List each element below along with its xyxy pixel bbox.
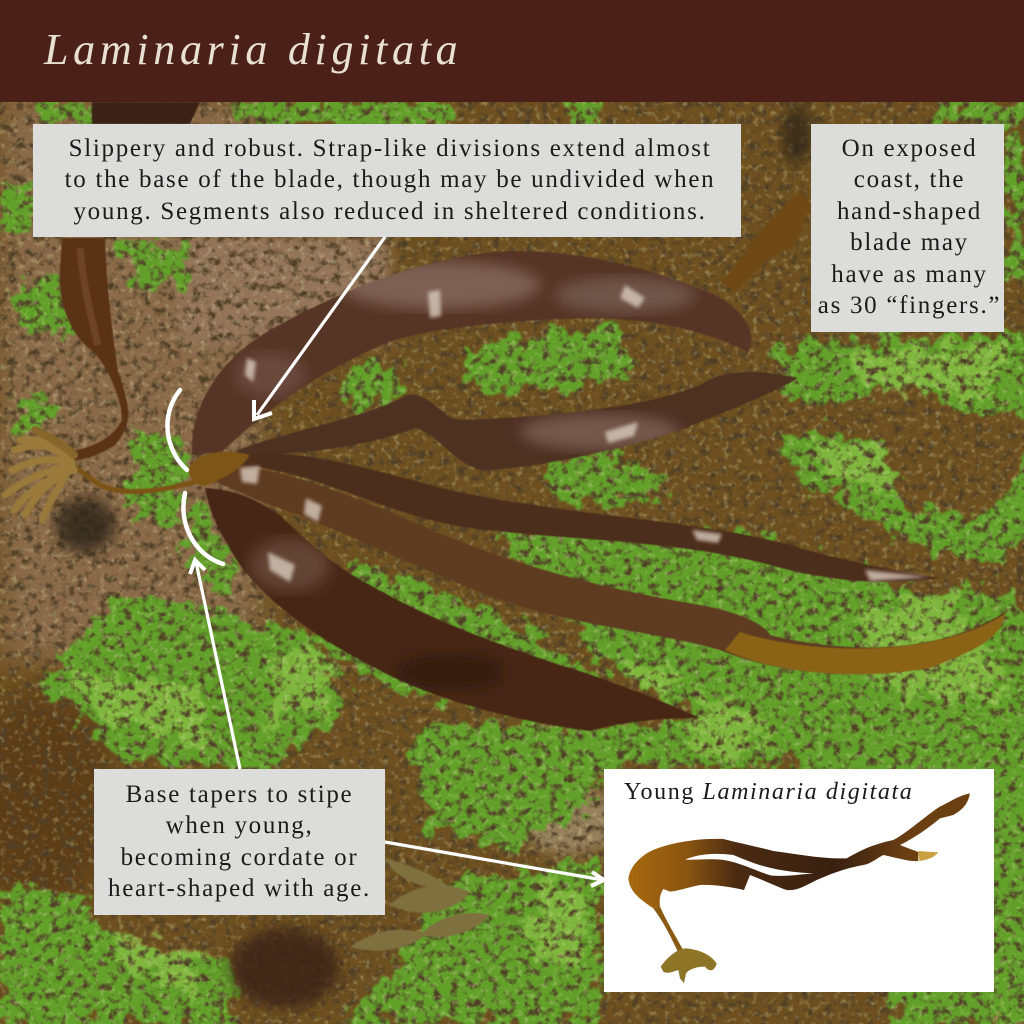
callout: number of fingers bbox=[811, 124, 1004, 332]
callout: number of fingers: have as many bbox=[831, 261, 988, 288]
title: Laminaria digitata bbox=[44, 25, 462, 74]
callout: blade divisions: Slippery and robust. Strap-like divisions extend almost bbox=[69, 135, 711, 162]
blade base junction bbox=[188, 452, 250, 486]
holdfast and stipe bbox=[5, 430, 195, 520]
blade 3: thin long frond bbox=[225, 453, 940, 582]
blade 2: wavy upper-middle frond bbox=[238, 372, 798, 470]
dark hollow in seabed bbox=[55, 497, 115, 553]
callout: base shape: Base tapers to stipe bbox=[126, 781, 353, 808]
callout: base shape: heart-shaped with age. bbox=[108, 875, 371, 902]
blade shading bbox=[235, 261, 695, 692]
callout: number of fingers: blade may bbox=[850, 229, 969, 256]
callout: base shape bbox=[94, 769, 385, 915]
glare highlights bbox=[240, 285, 930, 582]
white arc brackets at blade base bbox=[167, 390, 223, 564]
arrow: top text to blade bbox=[254, 237, 385, 419]
young kelp illustration bbox=[628, 793, 970, 984]
callout: number of fingers: hand-shaped bbox=[837, 198, 982, 225]
dark seaweed clump at bottom bbox=[230, 928, 340, 1008]
callout: blade divisions: young. Segments also reduced in sheltered conditions. bbox=[73, 198, 707, 225]
callout: blade divisions: to the base of the blade, though may be undivided when bbox=[65, 166, 715, 193]
main kelp blades bbox=[188, 251, 1005, 731]
callout: number of fingers: as 30 “fingers.” bbox=[818, 292, 1001, 319]
arrow: base text to blade base bbox=[190, 560, 240, 769]
bright highlights in sea lettuce bbox=[60, 345, 1010, 990]
callout: base shape: when young, bbox=[166, 812, 313, 839]
blade 4: long frond with olive tip bbox=[210, 462, 1005, 674]
right side kelp frond behind text box bbox=[722, 190, 812, 292]
dark kelp top-left blade bbox=[60, 102, 200, 462]
callout: blade divisions bbox=[33, 124, 741, 237]
blade 5: broad lower frond bbox=[205, 488, 700, 731]
dark crevice at top right bbox=[781, 105, 813, 165]
header band bbox=[0, 0, 1024, 102]
callout: number of fingers: On exposed bbox=[842, 135, 977, 162]
blade 1: upper looping frond bbox=[192, 251, 751, 455]
panel: young specimen photo bbox=[604, 769, 994, 992]
arrow: base text to young specimen bbox=[385, 842, 604, 886]
callout: number of fingers: coast, the bbox=[854, 166, 965, 193]
specimen caption: Young Laminaria digitata bbox=[624, 779, 913, 805]
small olive seaweed tuft at bottom bbox=[350, 858, 490, 950]
callout: base shape: becoming cordate or bbox=[121, 844, 358, 871]
